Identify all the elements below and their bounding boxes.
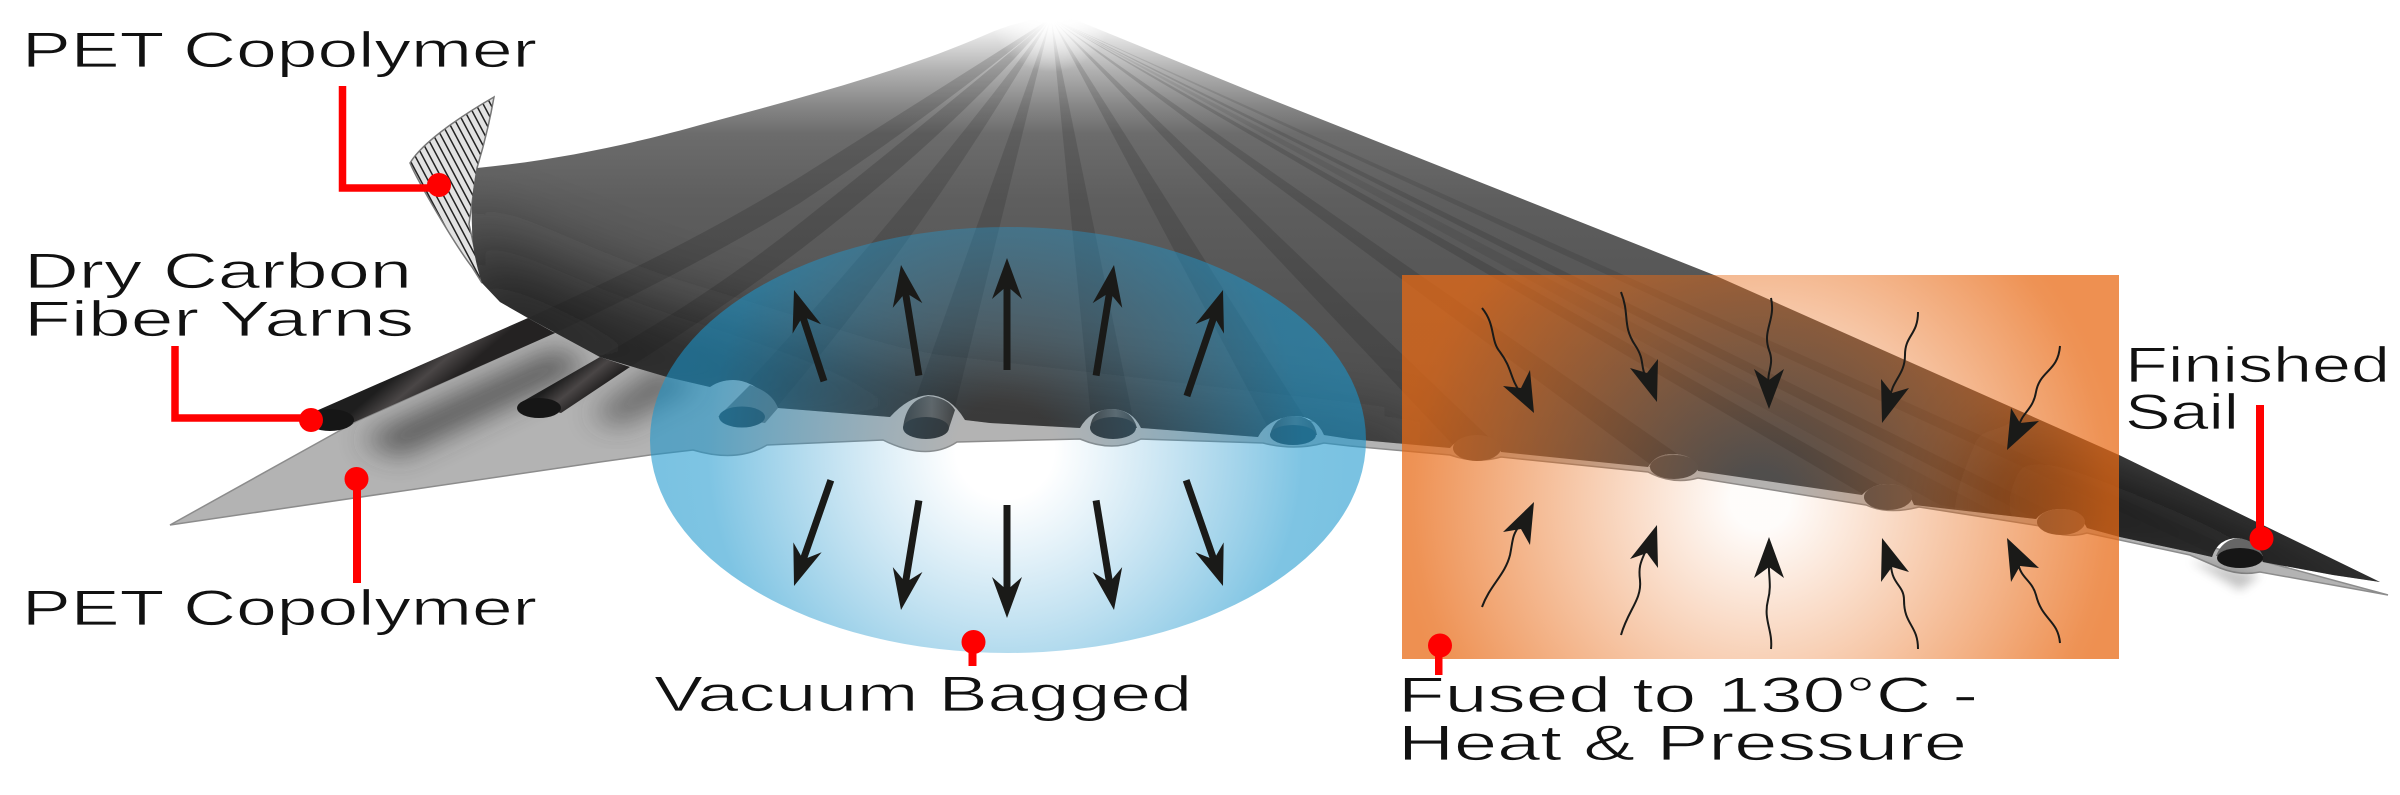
yarn body [316, 318, 555, 423]
sail membrane [472, 26, 2380, 582]
heading: Finished [2125, 337, 2390, 393]
heat arrow down 5 [2007, 346, 2060, 450]
film sheet [170, 330, 2388, 595]
yarn section 8 [2037, 509, 2085, 521]
arrow up 4 [1081, 263, 1129, 378]
panel: heat zone [1402, 275, 2119, 659]
leader [175, 346, 311, 418]
yarn section 5 [1453, 436, 1500, 448]
heading: Vacuum Bagged [654, 666, 1192, 722]
label: Vacuum Bagged [654, 630, 1192, 722]
arrow down 3 [992, 505, 1022, 618]
label: Dry Carbon Fiber Yarns [24, 243, 414, 432]
leader dot [344, 467, 368, 491]
arrow up 3 [992, 258, 1022, 370]
top PET copolymer hatched flap [410, 97, 494, 283]
label: Dry Carbon Fiber Yarns: Fiber Yarns [24, 291, 414, 347]
heat arrow up 5 [2007, 538, 2060, 643]
vacuum arrows [780, 258, 1237, 618]
heat arrows [1482, 292, 2060, 649]
yarn section 3 [1090, 409, 1137, 428]
yarn section 6 [1649, 454, 1697, 467]
yarn shadow 2 [590, 365, 700, 425]
leader dot [1428, 634, 1452, 658]
dry carbon yarn 2 [517, 357, 630, 418]
sail edge darkening [450, 225, 2400, 630]
yarn section 9 [2216, 538, 2263, 556]
label: Fused to 130°C - Heat & Pressure [1398, 634, 1978, 771]
yarn shadow 1 [360, 350, 590, 455]
arrow up 5 [1173, 285, 1237, 401]
yarn section 7 [1864, 484, 1912, 496]
leader [2256, 405, 2264, 538]
heading: Dry Carbon [24, 243, 412, 299]
leader [968, 642, 976, 666]
sail body [472, 18, 2380, 582]
heat arrow down 3 [1754, 298, 1784, 409]
arrow down 1 [780, 475, 845, 591]
yarn end [517, 398, 561, 418]
arrow up 1 [780, 285, 838, 386]
heading: PET Copolymer [22, 22, 537, 78]
yarn section 2 [903, 396, 955, 428]
label: Fused to 130°C - Heat & Pressure: Heat & Pressure [1398, 715, 1967, 771]
arrow down 2 [886, 498, 934, 612]
heat arrow up 3 [1754, 537, 1784, 649]
label: Finished Sail: Sail [2125, 384, 2239, 440]
panel: vacuum bag zone [650, 227, 1366, 653]
heat arrow up 4 [1881, 538, 1918, 649]
embedded yarn cross-sections [718, 385, 2263, 568]
yarn section 1 [718, 385, 778, 423]
heat arrow down 4 [1881, 312, 1918, 423]
leader dot [962, 630, 986, 654]
yarn body [520, 357, 630, 413]
yarn shadow 3 [2190, 560, 2260, 590]
arrow up 2 [886, 263, 934, 378]
leader dot [427, 173, 451, 197]
leader dot [299, 408, 323, 432]
label: PET Copolymer bottom [22, 467, 537, 636]
heat arrow down 1 [1482, 308, 1534, 413]
label: Finished Sail [2125, 337, 2390, 550]
arrow down 5 [1172, 475, 1237, 591]
yarn end [306, 409, 354, 431]
heat arrow down 2 [1621, 292, 1658, 402]
leader [342, 86, 439, 188]
leader dot [2250, 526, 2274, 550]
apex fade [989, 0, 1113, 72]
heat arrow up 1 [1482, 502, 1534, 607]
yarn section 4 [1270, 416, 1317, 435]
heat arrow up 2 [1621, 525, 1658, 635]
heading: Fused to 130°C - [1398, 667, 1978, 723]
leader [353, 479, 361, 583]
label: PET Copolymer top [22, 22, 537, 197]
bottom PET film [170, 330, 2388, 595]
arrow down 4 [1081, 498, 1129, 612]
heading: PET Copolymer [22, 580, 537, 636]
leader [1435, 645, 1442, 675]
dry carbon yarn 1 [306, 318, 555, 431]
yarn rays under the skin [601, 28, 1873, 494]
